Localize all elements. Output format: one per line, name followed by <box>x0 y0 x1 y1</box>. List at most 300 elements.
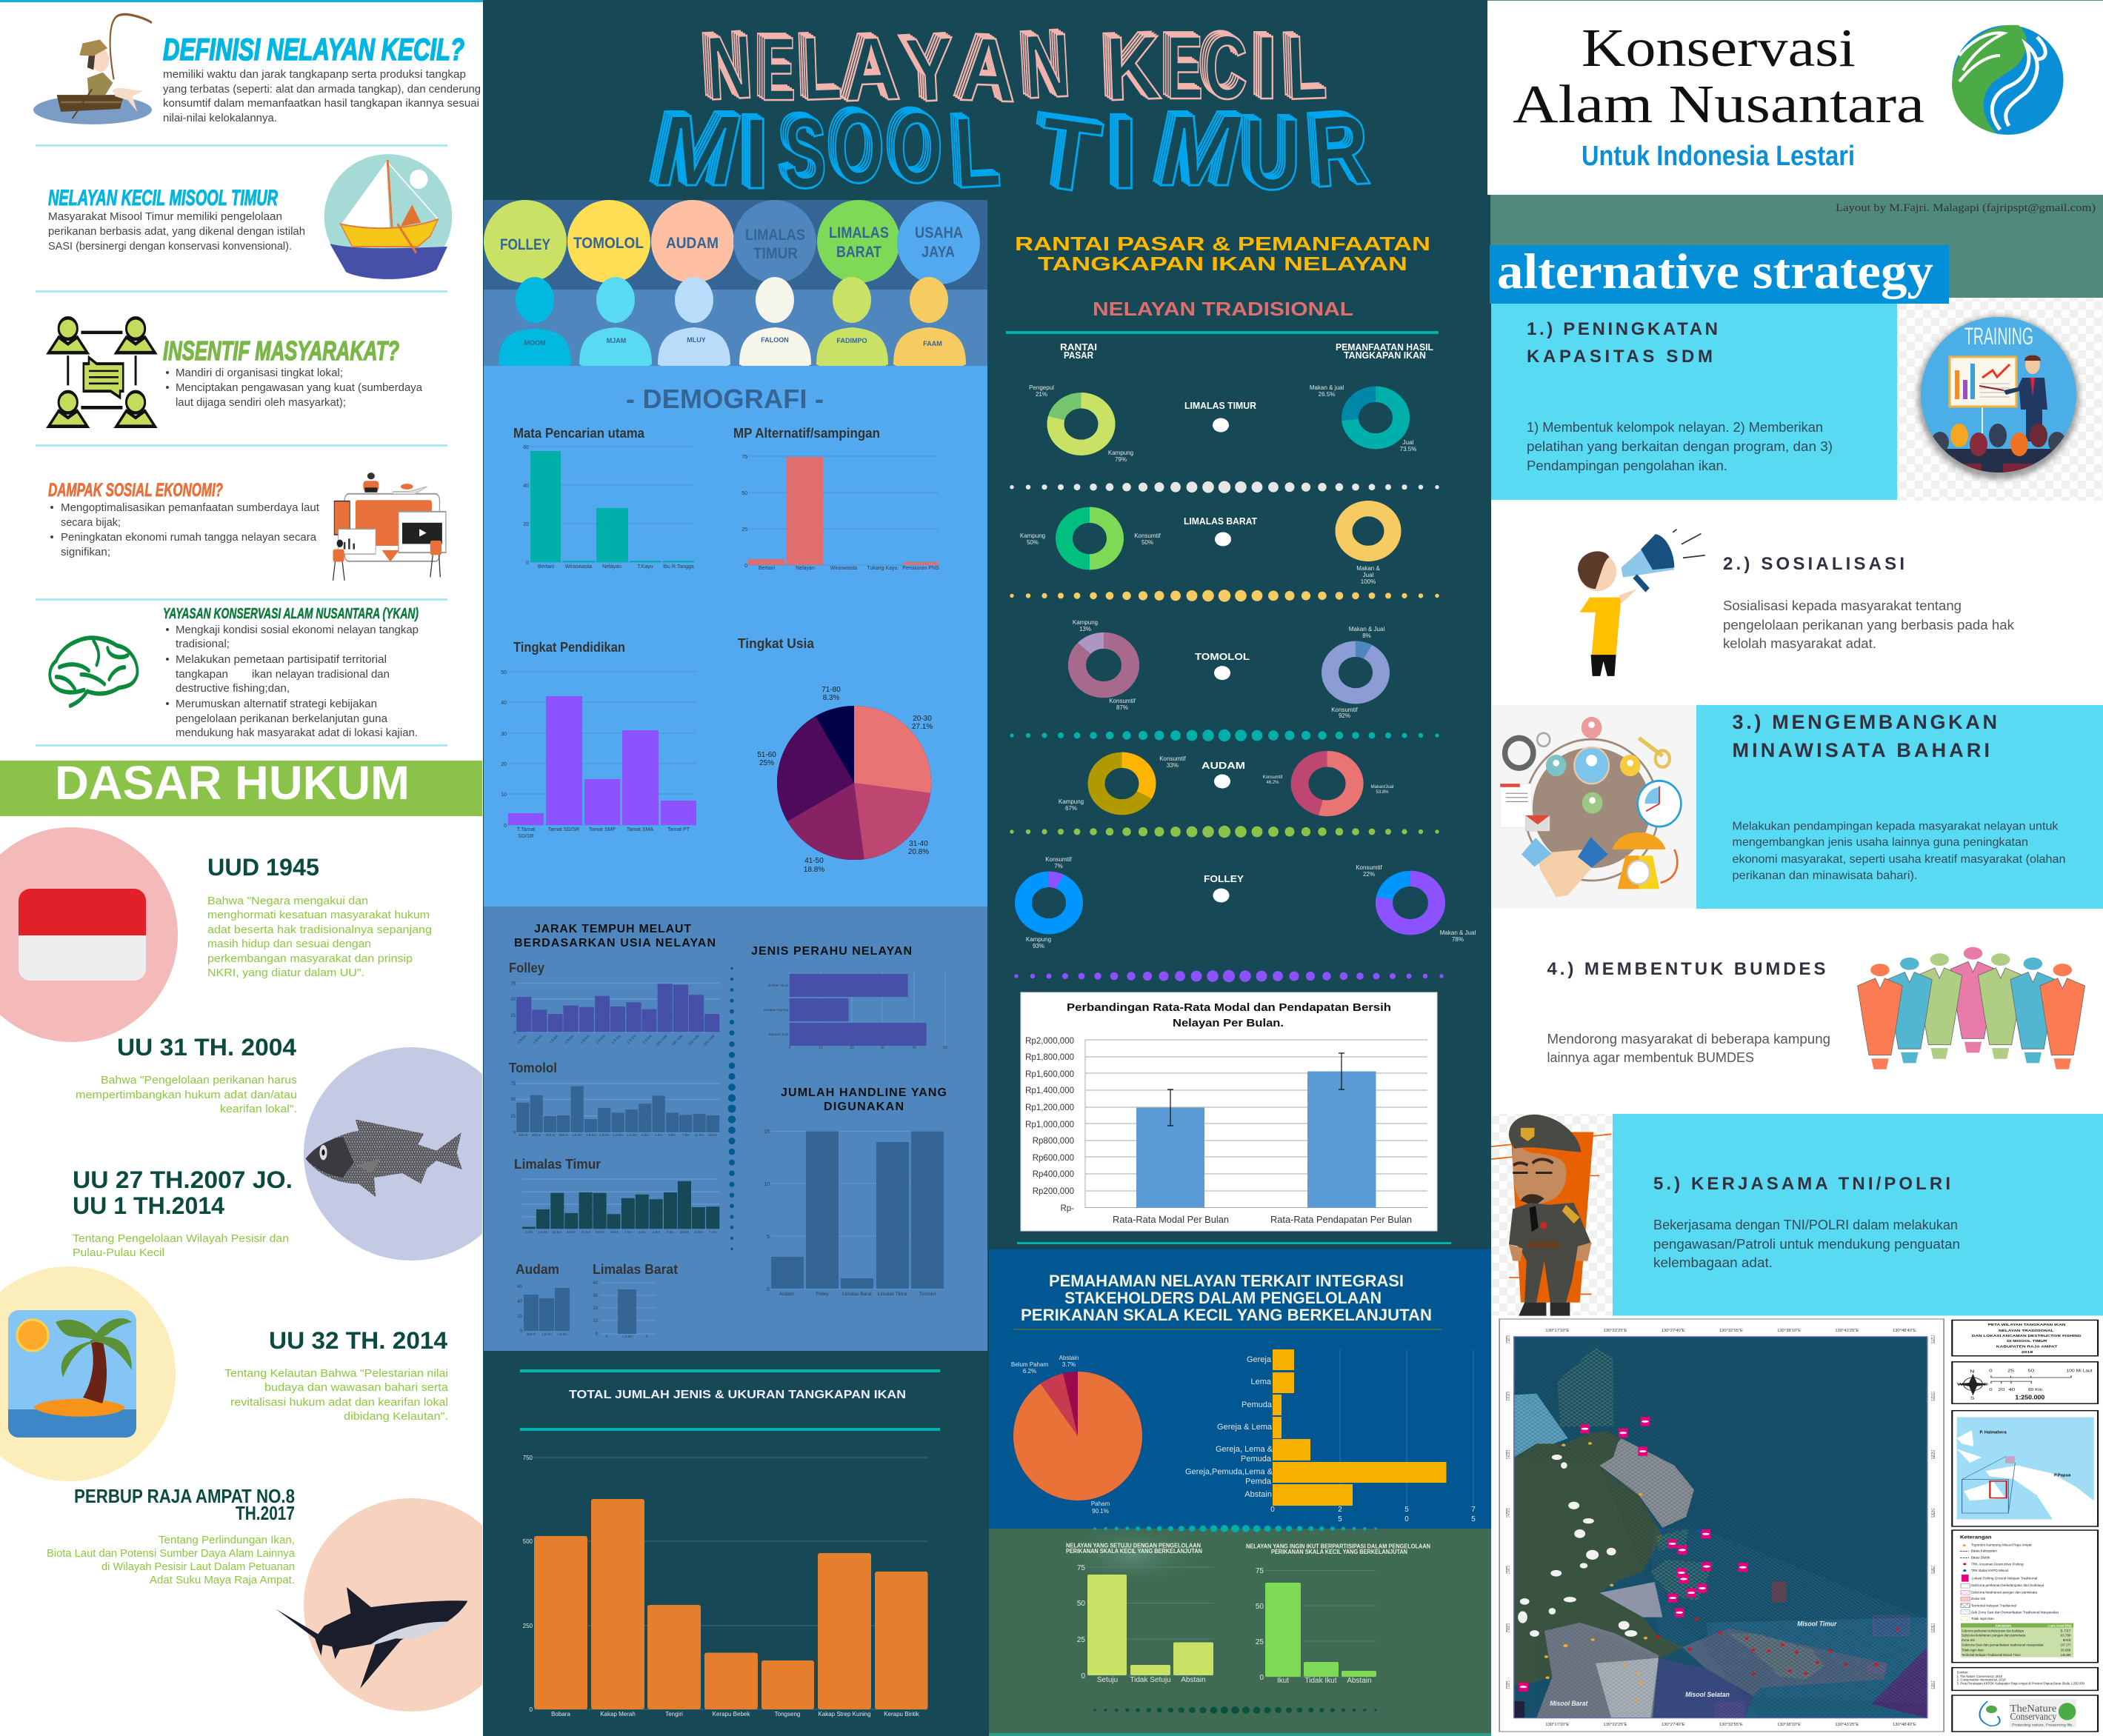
map frame <box>1499 1319 1944 1732</box>
donuts: audam: 33% <box>1167 762 1179 769</box>
chart: tomolol: 75 <box>510 1082 516 1086</box>
region labels: Misool Timur <box>1797 1620 1837 1628</box>
map legend: Subzona perikanan berkelanjutan dan budidaya <box>1971 1584 2044 1588</box>
map coordinates: 1°47'50"S <box>1506 1508 1512 1518</box>
column captions: TANGKAPAN IKAN <box>1344 350 1426 361</box>
chart: tingkat pendidikan: 30 <box>501 732 507 737</box>
map coordinates: 130°27'40"E <box>1662 1722 1685 1727</box>
map scale box: 0 <box>1989 1369 1993 1373</box>
chart: mp alternatif: MP Alternatif/sampingan <box>733 426 880 441</box>
chart: mata pencarian utama: Wiraswasta <box>565 564 592 570</box>
chart: stakeholder bars: 5 <box>1471 1515 1476 1523</box>
title: misool timur: M <box>1150 95 1253 207</box>
region labels: Misool Selatan <box>1685 1692 1730 1698</box>
text: perbup raja ampat: Tentang Perlindungan Ikan, <box>159 1534 295 1546</box>
chart: setuju: Tidak Setuju <box>1130 1676 1171 1684</box>
map coordinates: 1°42'35"S <box>1506 1450 1512 1459</box>
chart: jenis perahu nelayan: 30 <box>880 1046 884 1050</box>
map legend: TRK Batas KKPD Misool <box>1971 1569 2008 1573</box>
chart: stakeholder bars: 7 <box>1471 1506 1476 1514</box>
chart: limalas barat: Limalas Barat <box>593 1262 678 1277</box>
chart: mata pencarian utama <box>513 426 694 570</box>
text: minawisata: 3.) MENGEMBANGKAN <box>1732 711 1997 733</box>
chart: understanding pie: 6.2% <box>1023 1368 1036 1375</box>
text: ykan list: mendukung hak masyarakat adat di lokasi kajian. <box>176 727 418 739</box>
heading: pemahaman: PEMAHAMAN NELAYAN TERKAIT INTEGRASI <box>1049 1272 1404 1290</box>
title: nelayan kecil: L <box>1285 16 1328 118</box>
heading band: dasar hukum <box>0 756 482 816</box>
inset map <box>1952 1411 2098 1526</box>
chart: catch totals: Kakap Merah <box>600 1711 636 1717</box>
chart: stakeholder bars: Gereja,Pemuda,Lema & <box>1185 1468 1273 1477</box>
chart: folley <box>509 961 719 1047</box>
donuts: limalas timur: 73.5% <box>1400 446 1416 453</box>
people figures: MJAM <box>607 337 626 344</box>
brand wordmark: Alam Nusantara <box>1513 74 1924 134</box>
text: definisi body: yang terbatas (seperti: alat dan armada tangkap), dan cenderung <box>163 83 481 96</box>
map legend: Tidak ingin Ikan <box>1971 1618 1994 1621</box>
map coordinates: 130°38'10"E <box>1777 1328 1801 1333</box>
donuts: limalas barat: LIMALAS BARAT <box>1184 515 1257 527</box>
fishing ground markers <box>1519 1417 1747 1692</box>
text: ykan list: destructive fishing;dan, <box>176 682 290 695</box>
village bubbles: LIMALAS <box>745 227 805 244</box>
text: uu 31 <box>76 1034 297 1115</box>
chart: jenis perahu nelayan <box>751 945 947 1050</box>
map legend: Subzona ketahanan pangan dan pariwisata <box>1971 1591 2038 1595</box>
title: nelayan kecil: L <box>801 17 843 119</box>
chart: understanding pie: Paham <box>1091 1500 1110 1507</box>
chart: mata pencarian utama: 0 <box>526 561 529 566</box>
panel: demografi <box>484 366 987 907</box>
chart: folley: 1,8 km <box>549 1034 559 1045</box>
partner logos: TheNature <box>2010 1703 2057 1714</box>
panel: rantai pasar <box>1006 233 1476 1244</box>
chart: limalas timur: 15 km <box>680 1230 689 1234</box>
chart: limalas barat: 40 <box>593 1281 599 1286</box>
text: sosialisasi: kelolah masyarakat adat. <box>1723 636 1876 651</box>
text: minawisata: Melakukan pendampingan kepada masyarakat nelayan untuk <box>1732 821 2059 832</box>
chart: catch totals: Tengiri <box>665 1711 683 1717</box>
map legend: 5.737 <box>2061 1629 2070 1633</box>
chart: jenis perahu nelayan: 10 <box>819 1046 823 1050</box>
chart: perbandingan modal dan pendapatan: Rp1,000,000 <box>1025 1121 1074 1129</box>
chart: limalas timur: 34 km <box>553 1230 561 1234</box>
map scale box: W <box>1957 1381 1963 1387</box>
chart: tomolol: 4 km <box>655 1133 662 1137</box>
donuts: tomolol <box>1073 619 1384 719</box>
heading: insentif masyarakat: INSENTIF MASYARAKAT? <box>163 335 399 366</box>
chart: tingkat usia pie: 20-30 <box>913 715 932 723</box>
chart: mp alternatif <box>733 426 939 571</box>
chart: tomolol: 50 <box>510 1098 516 1102</box>
map coordinates: 1°53'5"S <box>1929 1566 1935 1574</box>
donuts: folley: Makan & Jual <box>1440 929 1476 936</box>
village bubbles: FOLLEY <box>500 236 550 253</box>
text: minawisata: mengembangkan jenis usaha lainnya guna peningkatan <box>1732 836 2028 849</box>
satellite map <box>1514 1337 1927 1718</box>
text: insentif list: Mandiri di organisasi tingkat lokal; <box>176 367 343 379</box>
people figures: MOOM <box>524 339 545 347</box>
chart: tingkat pendidikan: Tamat SMA <box>627 827 653 832</box>
donuts: folley: Konsumtif <box>1356 864 1383 871</box>
title: misool timur: R <box>1307 93 1373 209</box>
map coordinates: 1°32'5"S <box>1929 1335 1935 1343</box>
text: uu 27: Tentang Pengelolaan Wilayah Pesisir dan <box>73 1232 289 1245</box>
map coordinates: 2°3'35"S <box>1929 1681 1935 1689</box>
map legend: Uraian <box>1996 1624 2011 1628</box>
people figures <box>499 277 966 372</box>
text: sosialisasi: pengelolaan perikanan yang berbasis pada hak <box>1723 618 2015 632</box>
chart: audam: 60 <box>517 1285 523 1289</box>
chart: folley: 150 mile <box>703 1034 716 1047</box>
icon: collaboration hub <box>1491 705 1696 909</box>
heading: pemahaman <box>1021 1272 1432 1324</box>
chart: ikut: 0 <box>1259 1674 1264 1682</box>
chart: tingkat pendidikan <box>501 640 696 839</box>
map legend: Tidak ingin Ikan <box>1962 1649 1984 1652</box>
text: minawisata: perikanan dan minawisata bahari). <box>1732 869 1917 882</box>
chart: mp alternatif: Tukang Kayu <box>867 566 898 571</box>
chart: tomolol: 11 km <box>695 1133 704 1137</box>
map scale box: E <box>1984 1381 1988 1387</box>
brand wordmark: Untuk Indonesia Lestari <box>1582 141 1855 172</box>
chart: jumlah handline: Tomolol <box>919 1292 936 1297</box>
village bubbles <box>484 200 980 284</box>
map scale box <box>1952 1362 2098 1403</box>
icon: brain <box>50 638 137 706</box>
map sources: Sumber: <box>1957 1672 1969 1675</box>
panel: fishing area map <box>1499 1319 2098 1732</box>
panel: partisipasi nelayan <box>989 1522 1491 1736</box>
icon: shark in circle <box>276 1498 482 1712</box>
donuts: audam: Makan/Jual <box>1371 785 1393 789</box>
icon: grouper fish in circle <box>304 1047 482 1261</box>
donuts: limalas timur: Makan & jual <box>1310 384 1344 391</box>
map scale box: N <box>1970 1369 1974 1374</box>
donuts: folley: 22% <box>1363 871 1375 878</box>
chart: tomolol: 1,8 km <box>572 1133 582 1137</box>
text: ykan list: Mengkaji kondisi sosial ekonomi nelayan tangkap <box>176 624 419 636</box>
region labels <box>1550 1620 1837 1707</box>
donuts: limalas timur: 21% <box>1036 391 1047 398</box>
map coordinates <box>1506 1328 1935 1727</box>
donuts: tomolol: Kampung <box>1073 619 1098 626</box>
chart: tingkat pendidikan: 0 <box>504 824 507 829</box>
map coordinates: 1°37'20"S <box>1929 1392 1935 1401</box>
text: sosialisasi: Sosialisasi kepada masyarakat tentang <box>1723 598 1962 613</box>
icon: training badge: TRAINING <box>1964 323 2033 350</box>
map coordinates: 130°17'10"E <box>1545 1328 1569 1333</box>
donuts: tomolol: 8% <box>1362 632 1371 639</box>
icon: ykan logo <box>1952 25 2064 135</box>
chart: mp alternatif: Bertani <box>759 566 776 571</box>
text: uud 1945: menghormati kesatuan masyarakat hukum <box>207 909 430 921</box>
chart: folley: 1,8 km <box>611 1034 621 1045</box>
map coordinates: 130°38'10"E <box>1777 1722 1801 1727</box>
chart: folley: 1,8 km <box>564 1034 575 1045</box>
chart: jenis perahu nelayan: Sampan Dayung <box>763 1008 788 1012</box>
village bubbles: USAHA <box>915 224 963 241</box>
chart: catch totals: 0 <box>530 1706 533 1713</box>
chart: tingkat pendidikan: Tamat SMP <box>589 827 616 832</box>
map scale box: 1:250.000 <box>2015 1395 2045 1401</box>
donuts: tomolol: 87% <box>1116 704 1128 711</box>
map legend: Toponimi Kampung Misool Raja Ampat <box>1971 1543 2032 1547</box>
icon: digital workers illustration <box>333 473 446 581</box>
chart: tingkat pendidikan: Tamat SD/SR <box>548 827 579 832</box>
text: bumdes: Mendorong masyarakat di beberapa kampung <box>1547 1032 1830 1046</box>
panel: pemahaman nelayan <box>989 1249 1491 1529</box>
title: nelayan kecil: C <box>1204 17 1247 118</box>
text: uud 1945: perkembangan masyarakat dan prinsip <box>207 952 413 965</box>
map coordinates: 130°22'25"E <box>1604 1722 1627 1727</box>
chart: ikut: Abstain <box>1347 1677 1372 1685</box>
text: uu 31: kearifan lokal". <box>220 1103 297 1115</box>
partner logos <box>1952 1695 2098 1732</box>
text: uud 1945: Bahwa "Negara mengakui dan <box>207 895 368 907</box>
map scale box: 0 <box>1989 1388 1993 1392</box>
chart: perbandingan modal dan pendapatan: Rata-Rata Pendapatan Per Bulan <box>1270 1215 1412 1225</box>
text: perbup raja ampat: TH.2017 <box>236 1502 295 1524</box>
chart: folley: 150 mile <box>671 1034 684 1047</box>
text: insentif list <box>166 367 423 409</box>
chart: limalas barat: 30 <box>593 1294 599 1298</box>
chart: setuju: 75 <box>1077 1564 1085 1572</box>
village bubbles: AUDAM <box>666 235 719 252</box>
chart: perbandingan modal dan pendapatan: Rp800,000 <box>1033 1137 1074 1146</box>
chart: setuju: 0 <box>1081 1672 1085 1680</box>
chart: ikut: NELAYAN YANG INGIN IKUT BERPARTISIPASI DALAM PENGELOLAAN <box>1246 1543 1430 1549</box>
text: sosialisasi <box>1723 554 2015 651</box>
chart: tomolol <box>509 1061 719 1137</box>
heading: pemahaman: PERIKANAN SKALA KECIL YANG BERKELANJUTAN <box>1021 1306 1432 1324</box>
chart: limalas timur: Limalas Timur <box>514 1157 601 1172</box>
chart: stakeholder bars: Gereja <box>1247 1355 1272 1364</box>
chart: perbandingan modal dan pendapatan: Rata-Rata Modal Per Bulan <box>1113 1215 1229 1225</box>
text: perbup raja ampat: Adat Suku Maya Raja Ampat. <box>150 1574 295 1586</box>
chart: audam: 40 <box>517 1300 523 1304</box>
map legend: 93.780 <box>2061 1634 2070 1637</box>
chart: perbandingan modal dan pendapatan: Perbandingan Rata-Rata Modal dan Pendapatan Bersih <box>1067 1001 1391 1014</box>
donuts: limalas timur: Jual <box>1403 439 1414 446</box>
text: perbup raja ampat: di Wilayah Pesisir Laut Dalam Petuanan <box>101 1560 295 1573</box>
title: misool timur: M <box>646 95 751 207</box>
panel: jarak tempuh dan perahu <box>484 907 987 1351</box>
title: nelayan kecil: N <box>704 16 756 119</box>
panel: villages and people <box>484 200 987 372</box>
chart: audam <box>516 1262 570 1336</box>
map scale box: 25 <box>2007 1369 2014 1373</box>
chart: ikut: Tidak Ikut <box>1305 1677 1337 1685</box>
chart: limalas timur: 97 km <box>596 1230 604 1234</box>
chart: tomolol: 300 m <box>559 1133 569 1137</box>
donuts: tomolol: TOMOLOL <box>1195 651 1250 662</box>
map title box: DI MISOOL TIMUR <box>2007 1340 2047 1343</box>
title: misool timur: S <box>784 96 827 209</box>
chart: stakeholder bars: 5 <box>1404 1506 1409 1514</box>
map legend: Lokasi Fishing Ground Nelayan Tradisional <box>1972 1577 2037 1580</box>
text: kerjasama: Bekerjasama dengan TNI/POLRI dalam melakukan <box>1653 1218 1958 1232</box>
donuts: audam <box>1059 755 1393 812</box>
chart: perbandingan modal dan pendapatan: Rp1,800,000 <box>1025 1053 1074 1062</box>
chart: limalas timur: 10 km <box>694 1230 703 1234</box>
chart: limalas timur: 2 km <box>639 1230 646 1234</box>
chart: mp alternatif: 25 <box>741 527 747 533</box>
donuts: limalas barat: Jual <box>1363 572 1374 578</box>
chart: ikut: Ikut <box>1277 1677 1289 1685</box>
chart: jenis perahu nelayan: JENIS PERAHU NELAYAN <box>751 945 912 958</box>
chart: folley: 25 <box>510 1014 516 1018</box>
chart: audam: 1,8 km <box>541 1332 552 1336</box>
donuts: tomolol: Konsumtif <box>1109 698 1136 704</box>
clouds <box>1518 1455 1637 1637</box>
chart: folley: 1,8 km <box>580 1034 590 1045</box>
chart: mp alternatif: 75 <box>741 455 747 460</box>
donuts: limalas barat: 50% <box>1027 539 1039 546</box>
chart: perbandingan modal dan pendapatan: Rp200,000 <box>1033 1187 1074 1196</box>
chart: ikut: 25 <box>1256 1638 1264 1646</box>
map scale box: 50 <box>2027 1369 2035 1373</box>
donuts: limalas barat: 50% <box>1142 539 1153 546</box>
panel: right column background and brand <box>1487 0 2103 1736</box>
village bubbles: LIMALAS <box>829 224 889 241</box>
chart: folley: 150 mile <box>656 1034 669 1047</box>
chart: perbandingan modal dan pendapatan <box>1021 992 1437 1231</box>
chart: setuju: Setuju <box>1097 1676 1118 1684</box>
map coordinates: 130°43'25"E <box>1835 1328 1859 1333</box>
chart: jumlah handline: 15 <box>764 1129 770 1135</box>
village bubbles: TOMOLOL <box>573 235 644 252</box>
people figures: MLUY <box>687 336 706 344</box>
chart: tingkat pendidikan: 20 <box>501 762 507 767</box>
text: ykan list <box>166 624 419 739</box>
chart: mata pencarian utama: Ibu R.Tangga <box>663 564 694 570</box>
text: uu 32: Tentang Kelautan Bahwa "Pelestarian nilai <box>224 1367 448 1380</box>
text: minawisata <box>1732 711 2065 882</box>
chart: tingkat usia pie: 18.8% <box>804 866 824 874</box>
chart: tomolol: 1,8 km <box>613 1133 623 1137</box>
icon: sailing boat <box>324 154 452 279</box>
text: ykan list: Merumuskan alternatif strategi kebijakan <box>176 698 377 710</box>
donuts: folley: Konsumtif <box>1045 856 1073 863</box>
chart: tomolol: 1,8 km <box>599 1133 610 1137</box>
title: misool timur: O <box>833 91 884 204</box>
chart: audam: 300 m <box>527 1332 536 1336</box>
chart: jumlah handline: Limalas Barat <box>842 1292 872 1297</box>
text: perbup raja ampat <box>47 1485 296 1586</box>
heading: ykan: YAYASAN KONSERVASI ALAM NUSANTARA (YKAN) <box>163 606 419 622</box>
heading: demografi: - DEMOGRAFI - <box>626 384 824 414</box>
text: definisi body: nilai-nilai kelokalannya. <box>163 112 277 124</box>
chart: jumlah handline: Limalas Timur <box>878 1292 908 1297</box>
donuts: folley <box>1024 856 1476 949</box>
chart: mp alternatif: Nelayan <box>796 566 815 571</box>
chart: catch totals: 250 <box>523 1623 533 1629</box>
chart: tomolol: 1,8 km <box>627 1133 637 1137</box>
chart: limalas timur: 52 km <box>567 1230 576 1234</box>
map legend: 107.177 <box>2061 1644 2070 1647</box>
chart: stakeholder bars: Pemuda <box>1241 1455 1272 1463</box>
chart: limalas barat: 0 <box>646 1335 648 1338</box>
heading: nelayan kecil misool timur: NELAYAN KECIL MISOOL TIMUR <box>48 186 278 210</box>
text: peningkatan kapasitas: KAPASITAS SDM <box>1527 347 1713 367</box>
chart: tingkat pendidikan: Tingkat Pendidikan <box>513 640 625 655</box>
text: definisi body <box>163 68 481 124</box>
donuts: limalas timur: 79% <box>1115 456 1127 463</box>
chart: jenis perahu nelayan: Sampan 5 pk <box>768 1032 789 1036</box>
title: misool timur: I <box>1111 97 1138 210</box>
chart: folley: 150 mile <box>687 1034 701 1047</box>
chart: tingkat usia pie: 31-40 <box>909 840 928 848</box>
donuts: folley: 78% <box>1452 936 1464 943</box>
chart: jenis perahu nelayan: B.Fiber 15 pk <box>768 984 789 987</box>
chart: tomolol: 16 km <box>708 1133 717 1137</box>
icon: police officer <box>1491 1114 1613 1316</box>
chart: tingkat pendidikan: 10 <box>501 792 507 798</box>
title: nelayan kecil <box>704 14 1328 121</box>
chart: stakeholder bars: Gereja, Lema & <box>1216 1445 1273 1454</box>
donuts: folley: 7% <box>1054 863 1063 869</box>
heading band: dasar hukum: DASAR HUKUM <box>55 756 410 809</box>
chart: perbandingan modal dan pendapatan: Rp1,600,000 <box>1025 1070 1074 1079</box>
map legend: Territorial Nelayan Tradisional <box>1971 1604 2016 1608</box>
map title box: 2019 <box>2022 1351 2033 1355</box>
strategy 2 <box>1578 530 2015 676</box>
village bubbles: TIMUR <box>753 245 798 262</box>
chart: tingkat usia pie: 41-50 <box>804 857 824 865</box>
chart: catch totals <box>523 1455 927 1717</box>
map coordinates: 130°22'25"E <box>1604 1328 1627 1333</box>
chart: tingkat usia pie: 71-80 <box>821 686 841 694</box>
chart: mp alternatif: Pensiunan PNS <box>902 566 939 571</box>
chart: stakeholder bars: 5 <box>1338 1515 1342 1523</box>
donuts: audam: Kampung <box>1059 798 1084 805</box>
text: uu 32: budaya dan wawasan bahari serta <box>264 1381 449 1394</box>
map title box: DAN LOKASI ANCAMAN DESTRUCTIVE FISHING <box>1972 1335 2082 1338</box>
chart: jumlah handline: Folley <box>816 1292 829 1297</box>
chart: understanding pie: 3.7% <box>1062 1361 1076 1368</box>
map coordinates: 130°32'55"E <box>1719 1722 1743 1727</box>
text: sosialisasi: 2.) SOSIALISASI <box>1723 554 1904 574</box>
text: ykan list: tradisional; <box>176 638 230 650</box>
heading: jarak tempuh <box>514 923 716 949</box>
chart: ikut: PERIKANAN SKALA KECIL YANG BERKELANJUTAN <box>1271 1549 1407 1555</box>
donuts: audam: 46.2% <box>1266 781 1279 785</box>
chart: tingkat usia pie: 27.1% <box>912 723 933 731</box>
chart: understanding pie <box>1011 1355 1110 1515</box>
text: ykan list: Melakukan pemetaan partisipatif territorial <box>176 653 387 666</box>
chart: audam: 1,9 km <box>557 1332 567 1336</box>
map sources: 2. Conservation International, 2018 <box>1957 1678 2006 1682</box>
title: nelayan kecil: N <box>1021 14 1073 118</box>
map scale box: 40 <box>2008 1388 2015 1392</box>
people figures: FALOON <box>761 336 789 344</box>
chart: limalas timur: 1,8 km <box>538 1230 548 1234</box>
text: insentif list: laut dijaga sendiri oleh masyarkat); <box>176 396 346 409</box>
text: ykan list: tangkapan <box>176 668 228 681</box>
brand wordmark <box>1513 18 1924 172</box>
strategy 1 <box>1490 243 2103 501</box>
map coordinates: 1°58'20"S <box>1929 1623 1935 1633</box>
map title box <box>1952 1320 2098 1356</box>
inset map: P. Halmahera <box>1980 1430 2007 1435</box>
map coordinates: 1°37'20"S <box>1506 1392 1512 1401</box>
chart: jumlah handline <box>764 1086 947 1297</box>
donuts: limalas barat: Kampung <box>1020 533 1045 539</box>
map title box: KABUPATEN RAJA AMPAT <box>1996 1345 2058 1349</box>
donuts: tomolol: Makan & Jual <box>1349 626 1384 632</box>
